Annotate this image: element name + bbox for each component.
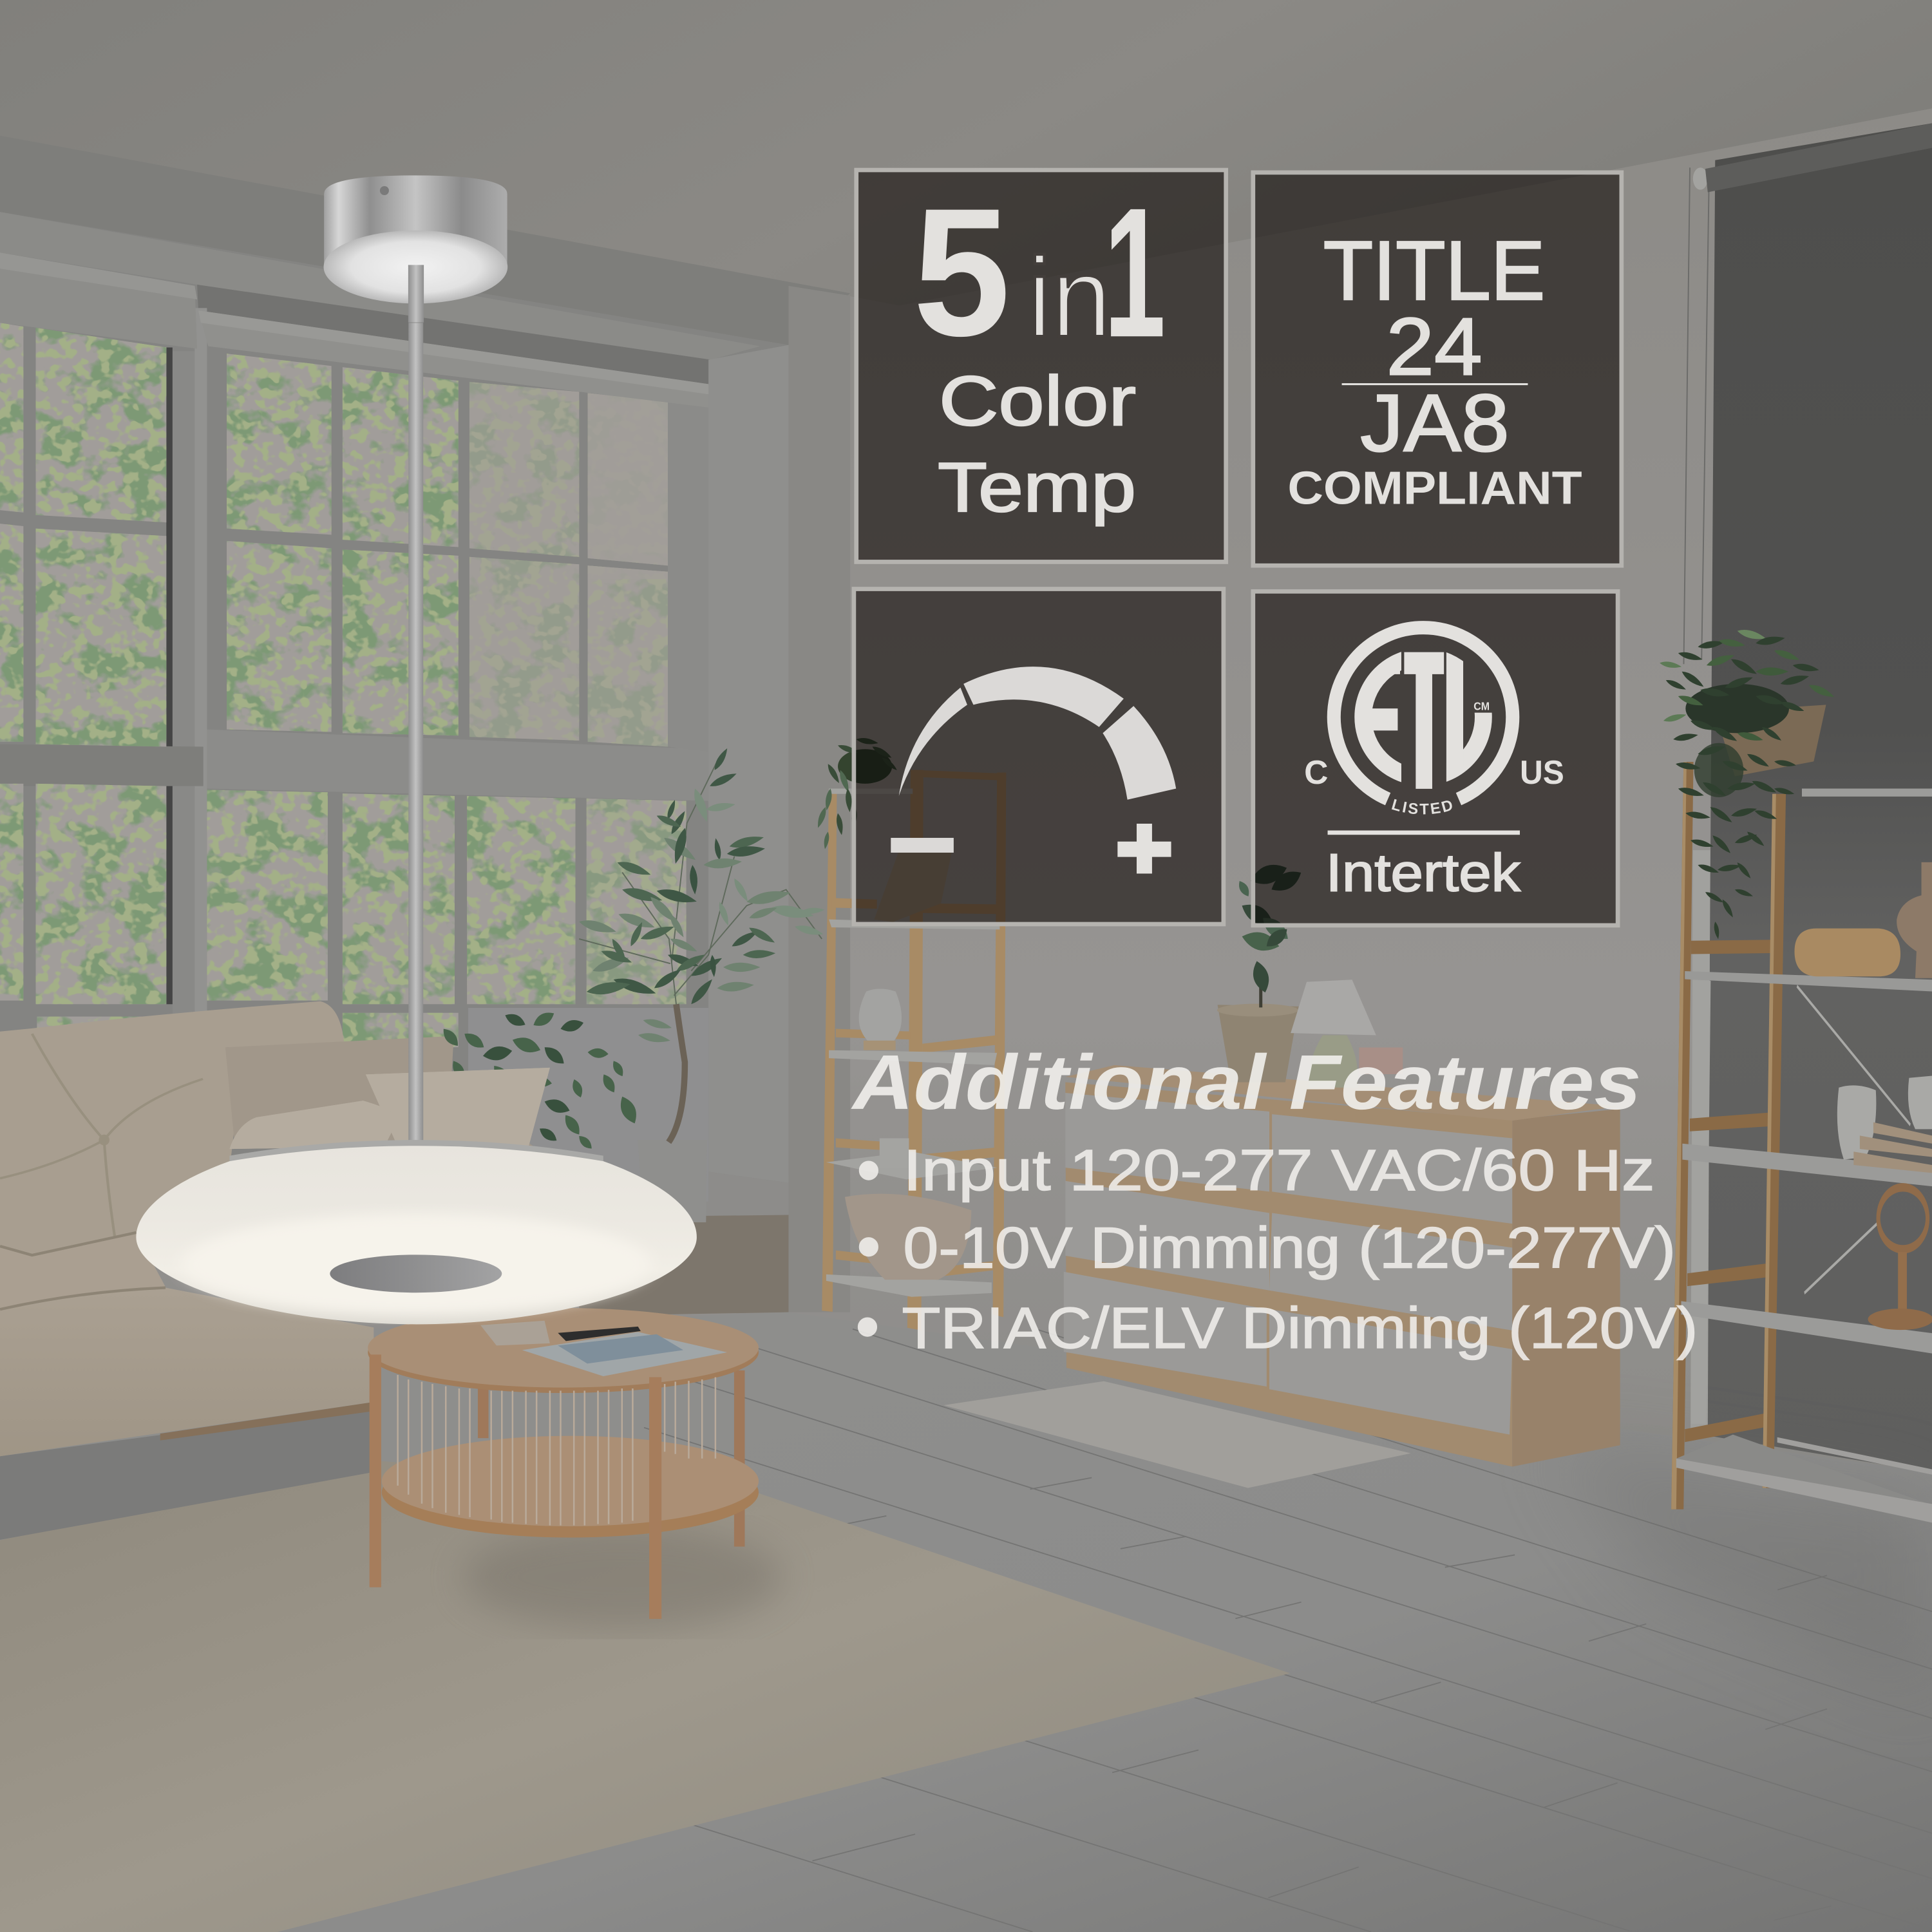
back wall [0,99,1932,1503]
left shelf trailing plant [815,737,898,849]
COMPLIANT: COMPLIANT [1287,462,1582,515]
sill and ledge [579,1172,788,1316]
white curtain strip [1691,981,1710,1424]
lower plant [440,1009,641,1151]
feature: TRIAC dimming: TRIAC/ELV Dimming (120V) [902,1296,1698,1361]
magazine [522,1332,727,1376]
glowing disc shade [136,1140,697,1324]
coffee table [368,1308,759,1619]
sofa and table group [0,1001,759,1619]
right shelf group [1671,762,1932,1522]
feature: input voltage: Input 120-277 VAC/60 Hz [903,1139,1655,1203]
front pillow [229,1101,398,1149]
shelf plant [880,1138,909,1168]
table shadow [462,1526,782,1629]
pillar wall [788,286,850,1312]
letter L: L [1439,609,1510,831]
word in: in [1028,234,1112,361]
tabletop [368,1312,759,1393]
lower shelf [382,1447,759,1538]
plant pot on dresser [1217,981,1299,1082]
Intertek: Intertek [1326,844,1521,902]
numeral 5: 5 [913,171,1010,374]
US mark: US [1520,753,1564,791]
window glass with foliage [0,308,708,1059]
dresser [1064,1065,1620,1466]
hanging plant on right shelf [1659,627,1836,940]
minus sign [891,838,954,853]
letter L [1363,609,1510,831]
cross braces [1797,986,1910,1293]
ceiling canopy [324,175,507,323]
window wall and frames [0,135,850,1232]
Color: Color [939,362,1136,440]
Temp: Temp [938,448,1136,527]
pillows over plant [229,1068,550,1149]
ornament [480,1321,550,1345]
plus sign [1117,824,1171,874]
panel: 5 in 1 color temp [857,169,1226,562]
floor [0,1312,1932,1932]
phone [558,1327,641,1341]
shelf objects [1794,862,1932,1330]
shelves [1676,788,1932,1522]
additional features heading: Additional Features [851,1039,1641,1126]
C mark: C [1304,753,1328,791]
CM mark: CM [1473,700,1490,713]
window side recess [708,345,788,1183]
numeral 1: 1 [1104,169,1166,375]
dresser and left shelf group [822,770,1620,1488]
ETL logo: LISTED [1391,799,1452,814]
panel: ETL listed Intertek [1251,589,1620,927]
sofa [0,1001,550,1456]
ETL logo [1327,621,1520,814]
shelf frame [1671,762,1786,1510]
olive tree [578,747,825,1142]
panel: Title 24 JA8 compliant [1253,173,1622,565]
wire lamp [859,989,902,1050]
LISTED [1356,787,1491,814]
letter E: E [1353,609,1405,831]
woven planter [1715,705,1826,776]
floor planks [644,1329,1932,1932]
fiddle leaf plant [1236,860,1305,994]
front legs [370,1354,661,1619]
lamp rod [408,323,423,1146]
ceiling [0,0,1932,305]
pale wall under window [468,1008,708,1220]
woven basket [845,1194,971,1280]
right roller blind [1690,123,1932,1472]
small rug [943,1381,1411,1488]
rug [0,1460,1290,1932]
dimmer arc gauge [899,667,1176,800]
blinds [0,252,711,408]
pendant lamp [136,175,697,1324]
books [875,853,952,922]
floor under sofa [0,1406,374,1540]
feature: 0-10V dimming: 0-10V Dimming (120-277V) [903,1217,1676,1281]
outer ring [1334,628,1513,799]
JA8: JA8 [1360,377,1510,468]
rods [398,1375,715,1526]
left shelf [822,770,1006,1331]
window pull chains [1683,167,1709,664]
TITLE: TITLE [1323,223,1545,317]
olive tree pot [638,1140,707,1222]
table lamp and candle [1291,980,1403,1088]
trunk [668,1004,685,1142]
striped pillow [366,1068,550,1147]
back pillow [225,1036,534,1147]
ETL logo: T [1403,609,1444,831]
panel: dimming [854,589,1224,924]
feature list [858,1139,1698,1361]
letter T [1403,609,1444,831]
24: 24 [1386,301,1482,392]
table back legs [478,1370,744,1547]
rule [1328,831,1520,835]
rule [1342,383,1528,385]
